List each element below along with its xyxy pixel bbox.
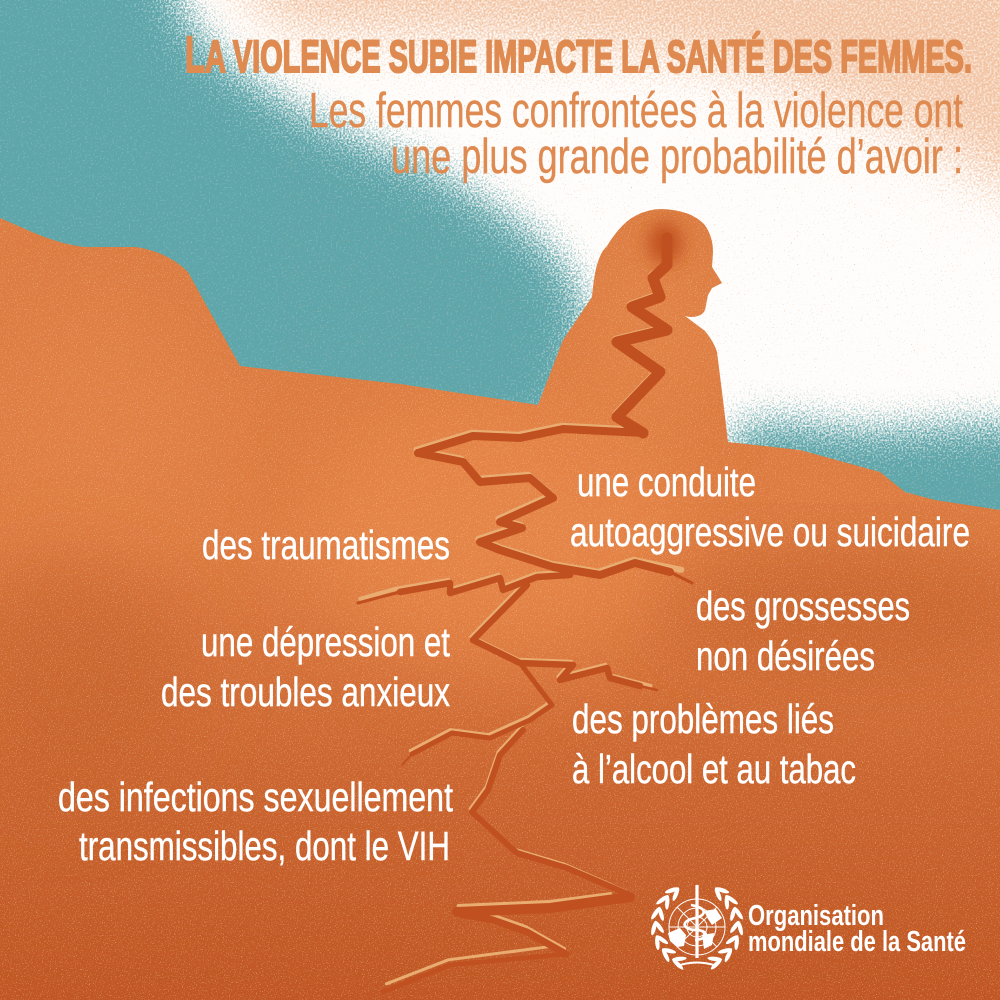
label: grossesses non désirées: des grossesses [696,583,910,629]
label: infections sexuellement transmissibles [58,774,453,869]
label: dépression et troubles anxieux: des troubles anxieux [161,669,450,715]
label: grossesses non désirées: non désirées [696,633,875,679]
sky background [0,0,1000,570]
label: traumatismes: des traumatismes [202,522,450,568]
sky: peach paint upper right [190,0,1000,240]
label: conduite autoagressive: une conduite [577,459,756,505]
label: dépression et troubles anxieux: une dépression et [201,619,450,665]
logo: WHO emblem [647,881,747,971]
sky: orange specks [280,0,1000,500]
label: alcool et tabac: des problèmes liés [572,696,834,742]
label: conduite autoagressive [570,459,970,555]
head blot [648,222,682,264]
label: dépression et troubles anxieux [161,619,450,715]
label: alcool et tabac: à l’alcool et au tabac [572,746,856,792]
label: grossesses non désirées [696,583,910,679]
logo: organisation name [748,900,966,958]
subtitle [309,84,963,184]
sky: teal paint lower right [715,412,1000,570]
label: infections sexuellement transmissibles: des infections sexuellement [58,774,453,820]
crack running through the woman and the ground [358,238,692,992]
label: alcool et tabac [572,696,856,792]
label: infections sexuellement transmissibles: transmissibles, dont le VIH [79,823,450,869]
ground and woman silhouette [0,200,1000,1000]
logo: organisation name: Organisation [748,900,884,932]
sky: teal paint upper left [0,0,600,460]
